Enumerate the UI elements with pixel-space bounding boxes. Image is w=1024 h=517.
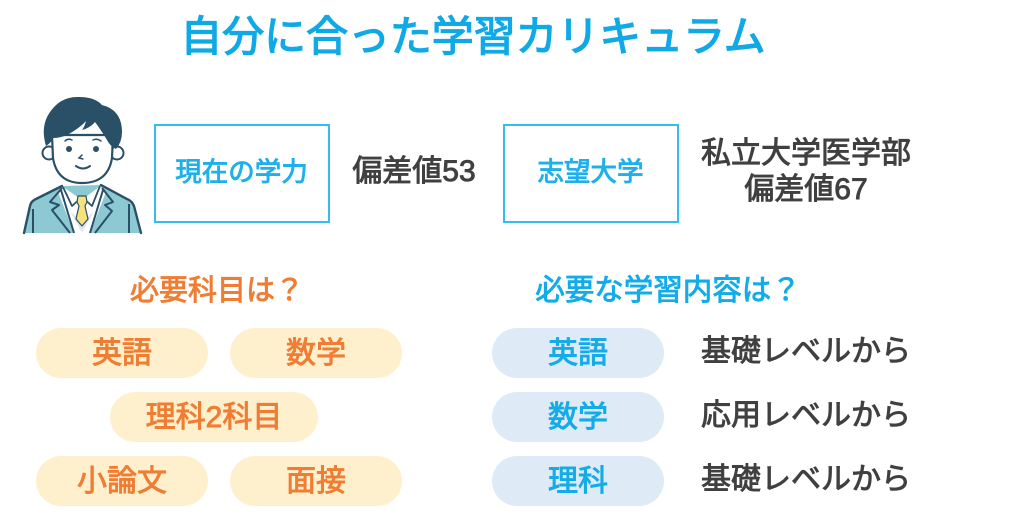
pill: English content: 英語 (548, 336, 608, 370)
icon: student in suit (22, 97, 142, 234)
pill: essay: 小論文 (77, 464, 167, 498)
level: Science: 基礎レベルから (701, 463, 911, 496)
lapels (50, 188, 74, 233)
pill: Math content: 数学 (548, 400, 608, 434)
pill: Math (230, 328, 402, 378)
pill: interview: 面接 (286, 464, 346, 498)
target university text (701, 136, 911, 206)
current deviation score: 偏差値53 (352, 155, 476, 188)
level: English: 基礎レベルから (701, 335, 911, 368)
box: current ability (154, 124, 330, 222)
pill: Science content: 理科 (548, 464, 608, 498)
pill: interview (230, 456, 402, 506)
hair (44, 97, 122, 149)
face (52, 135, 113, 183)
shirt and vest (58, 186, 106, 233)
collar (63, 186, 100, 206)
nose and mouth (79, 155, 83, 159)
pill: English (36, 328, 208, 378)
box: target university (502, 124, 678, 222)
box: current ability: 現在の学力 (175, 156, 308, 186)
box: target university: 志望大学 (538, 156, 644, 186)
title: 自分に合った学習カリキュラム (180, 13, 766, 60)
pill: two science subjects (110, 392, 318, 442)
pill: Math content (492, 392, 664, 442)
pill: essay (36, 456, 208, 506)
jacket (24, 185, 141, 233)
ears (42, 146, 56, 160)
level: Math: 応用レベルから (701, 399, 911, 432)
tie (76, 196, 88, 226)
eyes and brows (66, 146, 72, 152)
target university text: 偏差値67 (744, 173, 868, 206)
pill: English: 英語 (92, 336, 152, 370)
pill: Science content (492, 456, 664, 506)
pill: Math: 数学 (286, 336, 346, 370)
pill: English content (492, 328, 664, 378)
target university text: 私立大学医学部 (701, 137, 911, 170)
heading: required study content: 必要な学習内容は？ (535, 274, 801, 307)
heading: required subjects: 必要科目は？ (130, 275, 304, 307)
pill: two science subjects: 理科2科目 (146, 400, 282, 434)
